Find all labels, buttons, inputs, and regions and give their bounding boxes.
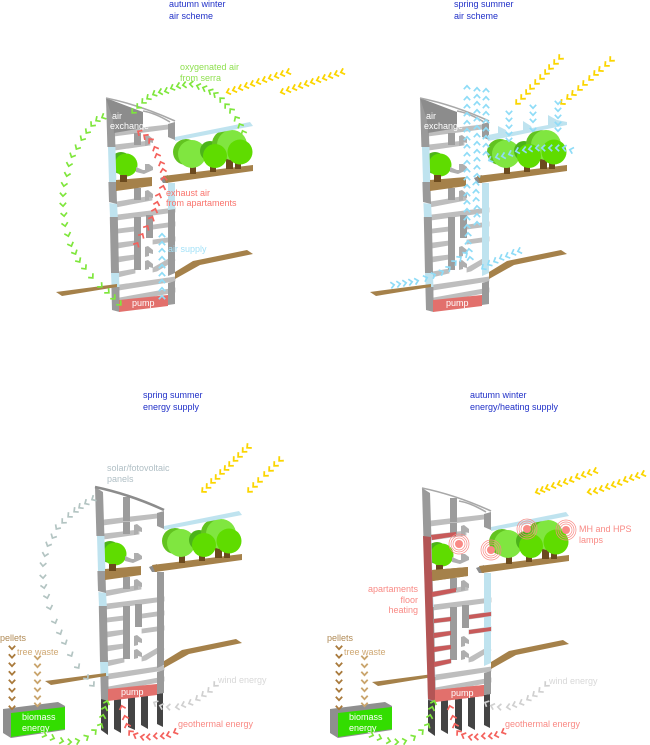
- label: lamps: MH and HPS: [579, 524, 632, 534]
- arrows: sun: [203, 447, 280, 491]
- louvred roof panel: [488, 115, 567, 141]
- panel: autumn winter air scheme: [56, 0, 342, 312]
- arrows: air through trees: [490, 103, 571, 160]
- title: spring summer energy supply: [143, 390, 203, 412]
- building section: [370, 98, 567, 312]
- arrows: tree waste: [36, 658, 38, 705]
- label: air exchange: exchange: [424, 121, 463, 131]
- label: pellets: pellets: [327, 633, 354, 643]
- arrows: rising air: [393, 87, 519, 285]
- label: floor heating: apartaments: [368, 584, 418, 594]
- title: autumn winter air scheme: [169, 0, 226, 21]
- label: solar panels: panels: [107, 474, 134, 484]
- title: autumn winter air scheme: air scheme: [169, 11, 213, 21]
- arrows: geothermal: [122, 707, 175, 737]
- label: floor heating: [368, 584, 418, 615]
- title: spring summer energy supply: energy supply: [143, 402, 200, 412]
- label: oxygenated air: oxygenated air: [180, 62, 239, 72]
- title: spring summer energy supply: spring summer: [143, 390, 203, 400]
- label: tree waste: tree waste: [344, 647, 386, 657]
- panel: spring summer air scheme: [370, 0, 611, 312]
- label: wind energy: wind energy: [548, 676, 598, 686]
- label: exhaust air: from apartaments: [166, 198, 237, 208]
- title: spring summer air scheme: air scheme: [454, 11, 498, 21]
- label: wind energy: wind energy: [217, 675, 267, 685]
- building section: [45, 487, 242, 701]
- label: air supply: air supply: [168, 244, 207, 254]
- label: lamps: lamps: [579, 535, 604, 545]
- label: floor heating: heating: [388, 605, 418, 615]
- arrows: pellets: [11, 648, 13, 708]
- label: tree waste: tree waste: [17, 647, 59, 657]
- lamps: [449, 519, 576, 560]
- arrows: air supply: [161, 235, 163, 297]
- arrows: wind: [155, 685, 215, 707]
- arrows: sun: [517, 58, 611, 103]
- building section: pump: [451, 688, 474, 698]
- arrows: sun: [537, 471, 643, 492]
- label: oxygenated air: from serra: [180, 73, 221, 83]
- geothermal piles: [101, 693, 163, 735]
- arrows: sun: [228, 72, 342, 92]
- label: air exchange: [110, 111, 149, 131]
- panel: spring summer energy supply: [0, 390, 280, 742]
- label: air exchange: air: [426, 111, 436, 121]
- geothermal piles: [428, 694, 490, 736]
- arrows: pellets: [338, 648, 340, 708]
- arrows: biomass to building: [372, 702, 434, 742]
- arrows: exhaust air: [137, 132, 164, 244]
- label: solar panels: [107, 463, 170, 484]
- arrows: biomass to building: [45, 702, 107, 742]
- label: lamps: [579, 524, 632, 545]
- label: exhaust air: [166, 188, 237, 208]
- floor heating: [423, 532, 491, 702]
- biomass box: [330, 702, 392, 738]
- panel: autumn winter energy and heating supply: [327, 390, 643, 742]
- label: geothermal energy: geothermal energy: [178, 719, 254, 729]
- label: air exchange: [424, 111, 463, 131]
- label: solar panels: solar/fotovoltaic: [107, 463, 170, 473]
- arrows: wind: [486, 685, 546, 707]
- title: autumn winter energy/heating supply: autumn winter: [470, 390, 527, 400]
- biomass box: [3, 702, 65, 738]
- arrows: solar panels: [43, 499, 93, 685]
- label: air exchange: exchange: [110, 121, 149, 131]
- title: autumn winter energy/heating supply: [470, 390, 559, 412]
- label: air exchange: air: [112, 111, 122, 121]
- arrows: oxygenated air: [63, 84, 243, 304]
- title: autumn winter energy/heating supply: energy/heating supply: [470, 402, 559, 412]
- label: geothermal energy: geothermal energy: [505, 719, 581, 729]
- arrows: geothermal: [450, 707, 503, 737]
- label: floor heating: floor: [400, 595, 418, 605]
- building section: [56, 98, 253, 312]
- title: spring summer air scheme: [454, 0, 514, 21]
- label: pellets: pellets: [0, 633, 27, 643]
- label: oxygenated air: [180, 62, 239, 83]
- arrows: tree waste: [364, 658, 366, 705]
- building section: [372, 488, 569, 702]
- label: exhaust air: exhaust air: [166, 188, 210, 198]
